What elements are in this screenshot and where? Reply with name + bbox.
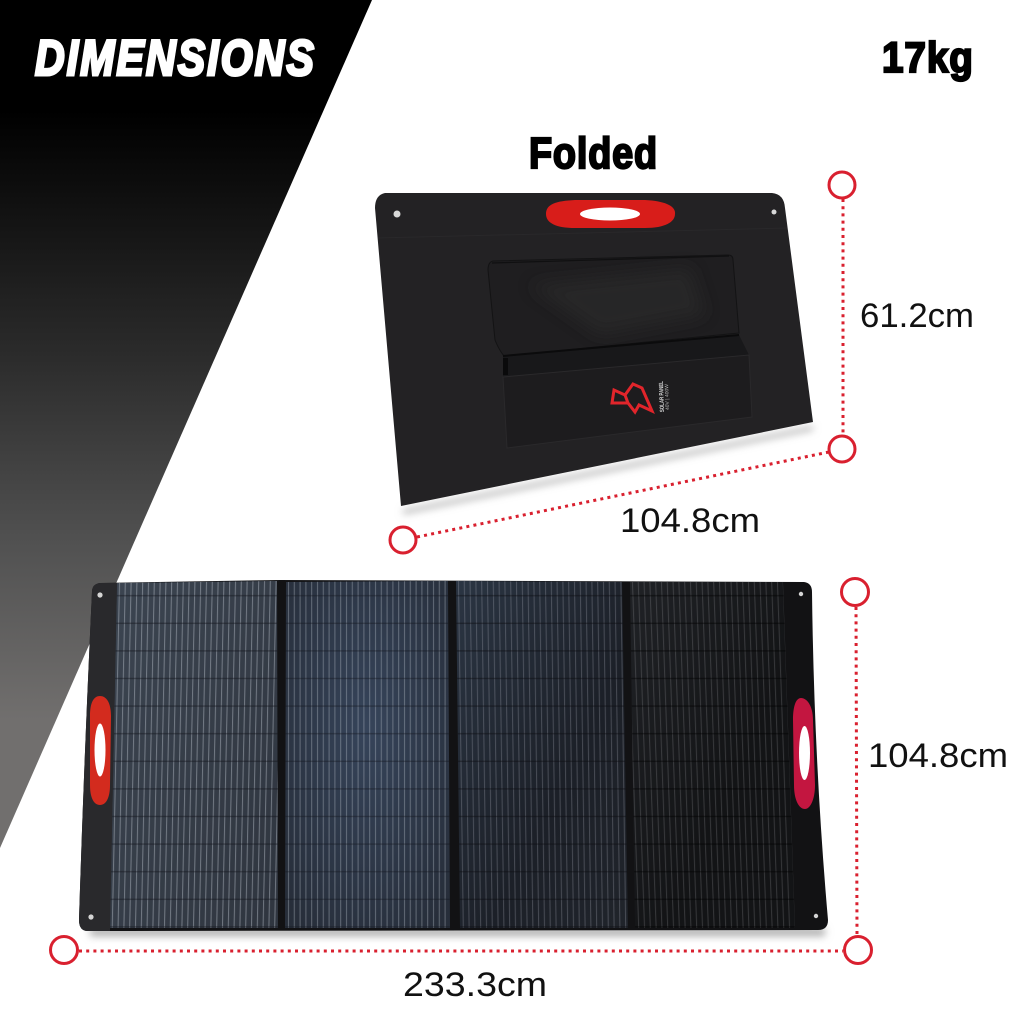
solar cell 2 [285,581,450,928]
folded carrying handle [546,200,675,228]
label: 233.3cm: 233.3cm [403,966,547,1004]
label: 104.8cm folded width: 104.8cm [620,502,760,540]
left end flap tint [79,583,117,931]
heading: Folded: Folded [529,128,657,178]
dotted line [856,607,857,935]
left ring [390,527,416,553]
upper zipped pouch [488,255,739,356]
background: black to grey diagonal wedge [0,0,372,848]
grommets [394,210,776,218]
wattage text on pouch: 40V | 400W [664,384,671,410]
grommets [88,592,818,920]
solar cell 1 [110,581,278,928]
label: 104.8cm unfolded height: 104.8cm [868,737,1008,775]
zipper pull [503,358,508,375]
title: Dimensions: DIMENSIONS [35,30,314,86]
unfolded height marker [842,578,872,964]
dotted line [417,452,829,537]
pouch fabric highlight [530,268,705,335]
pouch zip seam [492,256,729,263]
top ring [829,172,855,198]
dotted line [842,199,844,435]
solar cell 3 [456,581,628,928]
right carrying handle [793,698,815,809]
unfolded panel body [79,580,828,931]
bottom ring [844,936,872,964]
pouch bottom edge [503,335,739,356]
left carrying handle [90,696,111,805]
label: 61.2cm: 61.2cm [860,297,974,335]
dotted line [79,950,843,952]
unfolded panel shadow [90,928,825,936]
folded panel body [375,193,813,506]
folded solar panel [375,193,813,514]
folded width marker [390,452,829,553]
left ring [50,936,78,964]
folded height marker [829,172,855,462]
unfolded solar panel [79,580,828,936]
zipper gap [503,335,749,377]
bottom ring [829,436,855,462]
product text on pouch: SOLAR PANEL [659,381,666,412]
brand logo [612,384,652,412]
lower logo pouch [503,355,752,448]
folded panel shadow [403,426,813,514]
weight: 17kg: 17kg [882,33,973,81]
unfolded width marker [50,936,843,964]
top ring [842,578,868,606]
solar cell 4 [630,582,795,928]
top seam [378,228,787,238]
